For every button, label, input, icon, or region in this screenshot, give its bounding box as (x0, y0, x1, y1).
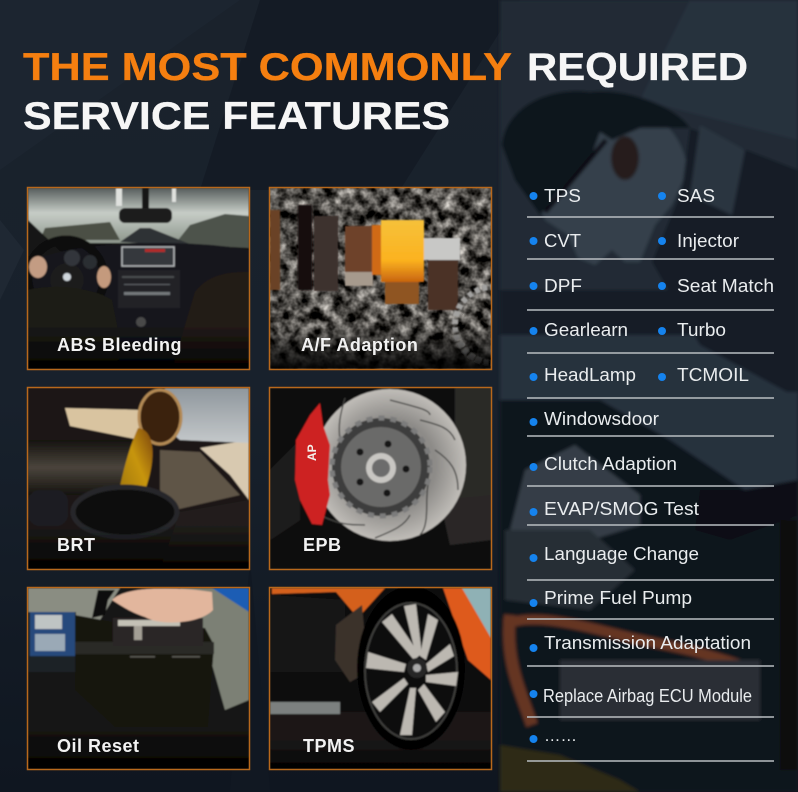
list items: EVAP/SMOG Test (544, 499, 699, 519)
list items: TCMOIL (677, 365, 749, 385)
oil stream (120, 427, 154, 488)
list items: DPF (544, 276, 582, 296)
brake disc (314, 389, 466, 541)
red caliper (295, 403, 330, 525)
list items: Language Change (544, 544, 699, 564)
hand (112, 588, 213, 622)
console (118, 270, 180, 308)
oil jug (510, 445, 640, 545)
infotainment screen (122, 247, 174, 266)
oil bottle (163, 388, 249, 443)
list items: Clutch Adaption (544, 454, 677, 474)
title: THE MOST COMMONLY (23, 46, 512, 89)
panel: ABS Bleeding (28, 188, 250, 370)
list items: Transmission Adaptation (544, 633, 751, 653)
hands and arms (29, 256, 47, 278)
mechanic arm (500, 390, 798, 490)
list items: TPS (544, 186, 581, 206)
title (23, 46, 748, 138)
mechanic hair (502, 91, 690, 215)
list items: Windowsdoor (544, 409, 659, 429)
list items: Seat Match (677, 276, 774, 296)
list items: HeadLamp (544, 365, 636, 385)
list items: CVT (544, 231, 581, 251)
panel: EPB: AP (305, 444, 319, 461)
filler neck (73, 487, 177, 537)
label: EPB (303, 535, 342, 555)
panel: BRT (28, 388, 250, 570)
steering wheel (28, 235, 108, 296)
bullets (530, 192, 666, 743)
list items: SAS (677, 186, 715, 206)
label: A/F Adaption (301, 335, 418, 355)
label: BRT (57, 535, 96, 555)
dashboard (28, 243, 249, 369)
mechanic shoulder (652, 128, 798, 398)
list items (543, 186, 774, 745)
label: Oil Reset (57, 736, 140, 756)
list items: Turbo (677, 320, 726, 340)
feature list (527, 186, 774, 761)
label: TPMS (303, 736, 355, 756)
list items: Prime Fuel Pump (544, 588, 692, 608)
rear-view mirror (119, 208, 172, 223)
car battery (75, 615, 214, 727)
panel: TPMS (270, 586, 492, 770)
list items: Injector (677, 231, 739, 251)
label: ABS Bleeding (57, 335, 182, 355)
panel: A/F Adaption (268, 186, 492, 370)
engine texture (270, 188, 491, 369)
mechanic photo backdrop (500, 0, 798, 792)
list items: Gearlearn (544, 320, 628, 340)
orange hose (505, 620, 740, 665)
title: SERVICE FEATURES (23, 95, 450, 138)
list items: Replace Airbag ECU Module (543, 686, 752, 706)
panel: EPB (270, 388, 492, 570)
glasses (545, 140, 606, 212)
mechanic head (510, 108, 688, 265)
ear (611, 136, 639, 180)
title: REQUIRED (527, 46, 748, 89)
wheel (357, 586, 465, 750)
gloved hand (695, 480, 798, 540)
panel: Oil Reset (28, 588, 250, 770)
list items: …… (544, 727, 577, 745)
